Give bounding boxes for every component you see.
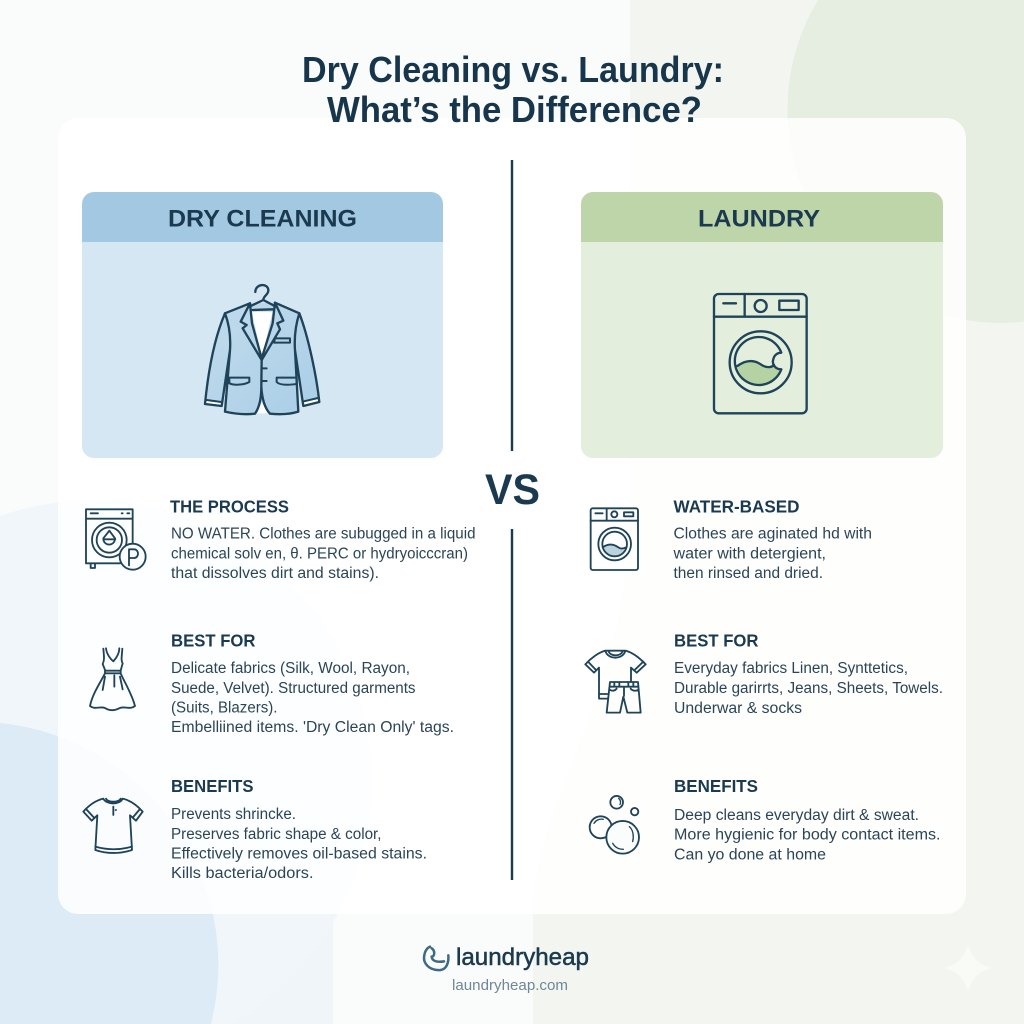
- vs label: VS: [485, 466, 540, 514]
- icon: blazer on hanger: [205, 285, 319, 414]
- panel: laundry: [581, 192, 943, 458]
- text: the process: that dissolves dirt and stains).: [171, 565, 379, 582]
- text: water-based: Clothes are aginated hd with: [674, 526, 872, 543]
- section: benefits dry cleaning: [83, 776, 427, 882]
- text: benefits laundry: Can yo done at home: [674, 846, 826, 864]
- heading: laundry: LAUNDRY: [698, 206, 820, 232]
- icon: washing machine: [714, 294, 807, 413]
- text: best for laundry: Durable garirrts, Jeans, Sheets, Towels.: [674, 680, 943, 697]
- heading: best for: BEST FOR: [674, 630, 759, 650]
- text: best for dry cleaning: Embelliined items. 'Dry Clean Only' tags.: [171, 719, 454, 736]
- text: benefits dry cleaning: Preserves fabric shape & color,: [171, 826, 382, 843]
- main card: [58, 118, 966, 914]
- icon: dress: [90, 648, 135, 710]
- section: best for dry cleaning: [90, 630, 454, 736]
- heading: dry cleaning: DRY CLEANING: [168, 206, 357, 232]
- heading: benefits: BENEFITS: [171, 776, 254, 796]
- text: best for laundry: [674, 660, 943, 717]
- text: benefits dry cleaning: Kills bacteria/odors.: [171, 865, 314, 882]
- section: water-based: [591, 496, 872, 582]
- title: [302, 49, 724, 130]
- brand name: laundryheap: [456, 944, 589, 971]
- title: What’s the Difference?: [327, 89, 702, 130]
- text: best for dry cleaning: Suede, Velvet). Structured garments: [171, 680, 416, 697]
- text: the process: [171, 526, 476, 582]
- text: best for dry cleaning: (Suits, Blazers).: [171, 700, 278, 716]
- text: benefits dry cleaning: Prevents shrincke.: [171, 806, 296, 823]
- panel: dry cleaning: [82, 192, 443, 458]
- heading: benefits: BENEFITS: [674, 776, 758, 796]
- icon: soap bubbles: [590, 796, 639, 854]
- text: benefits laundry: Deep cleans everyday dirt & sweat.: [674, 807, 919, 824]
- sparkle: [945, 945, 991, 991]
- text: benefits laundry: [674, 807, 940, 864]
- section: the process: [86, 496, 475, 582]
- text: water-based: [672, 526, 872, 582]
- text: best for laundry: Everyday fabrics Linen, Synttetics,: [674, 660, 908, 677]
- divider top: [511, 160, 513, 451]
- section: benefits laundry: [590, 776, 940, 864]
- section: best for laundry: [585, 630, 943, 717]
- text: the process: chemical solv en, θ. PERC or hydryoicccran): [171, 546, 468, 562]
- text: water-based: then rinsed and dried.: [674, 565, 823, 582]
- brand url: laundryheap.com: [452, 977, 568, 994]
- text: benefits laundry: More hygienic for body contact items.: [674, 826, 940, 844]
- heading: water-based: WATER-BASED: [674, 496, 800, 516]
- icon: small washing machine: [591, 508, 638, 570]
- icon: laundryheap mark: [424, 947, 448, 970]
- text: benefits dry cleaning: Effectively removes oil-based stains.: [171, 846, 427, 862]
- icon: dry cleaning machine: [86, 509, 146, 570]
- text: best for dry cleaning: Delicate fabrics (Silk, Wool, Rayon,: [171, 660, 410, 677]
- divider bottom: [511, 529, 513, 880]
- text: the process: NO WATER. Clothes are subugged in a liquid: [171, 526, 476, 543]
- text: best for laundry: Underwar & socks: [674, 700, 802, 717]
- heading: the process: THE PROCESS: [170, 496, 289, 516]
- text: best for dry cleaning: [171, 660, 454, 736]
- text: benefits dry cleaning: [171, 806, 427, 882]
- text: water-based: water with detergient,: [672, 546, 826, 562]
- title: Dry Cleaning vs. Laundry:: [302, 49, 724, 90]
- icon: henley t-shirt: [83, 799, 143, 853]
- icon: t-shirt and shorts: [585, 651, 646, 713]
- brand logo: [424, 944, 589, 994]
- heading: best for: BEST FOR: [171, 630, 256, 650]
